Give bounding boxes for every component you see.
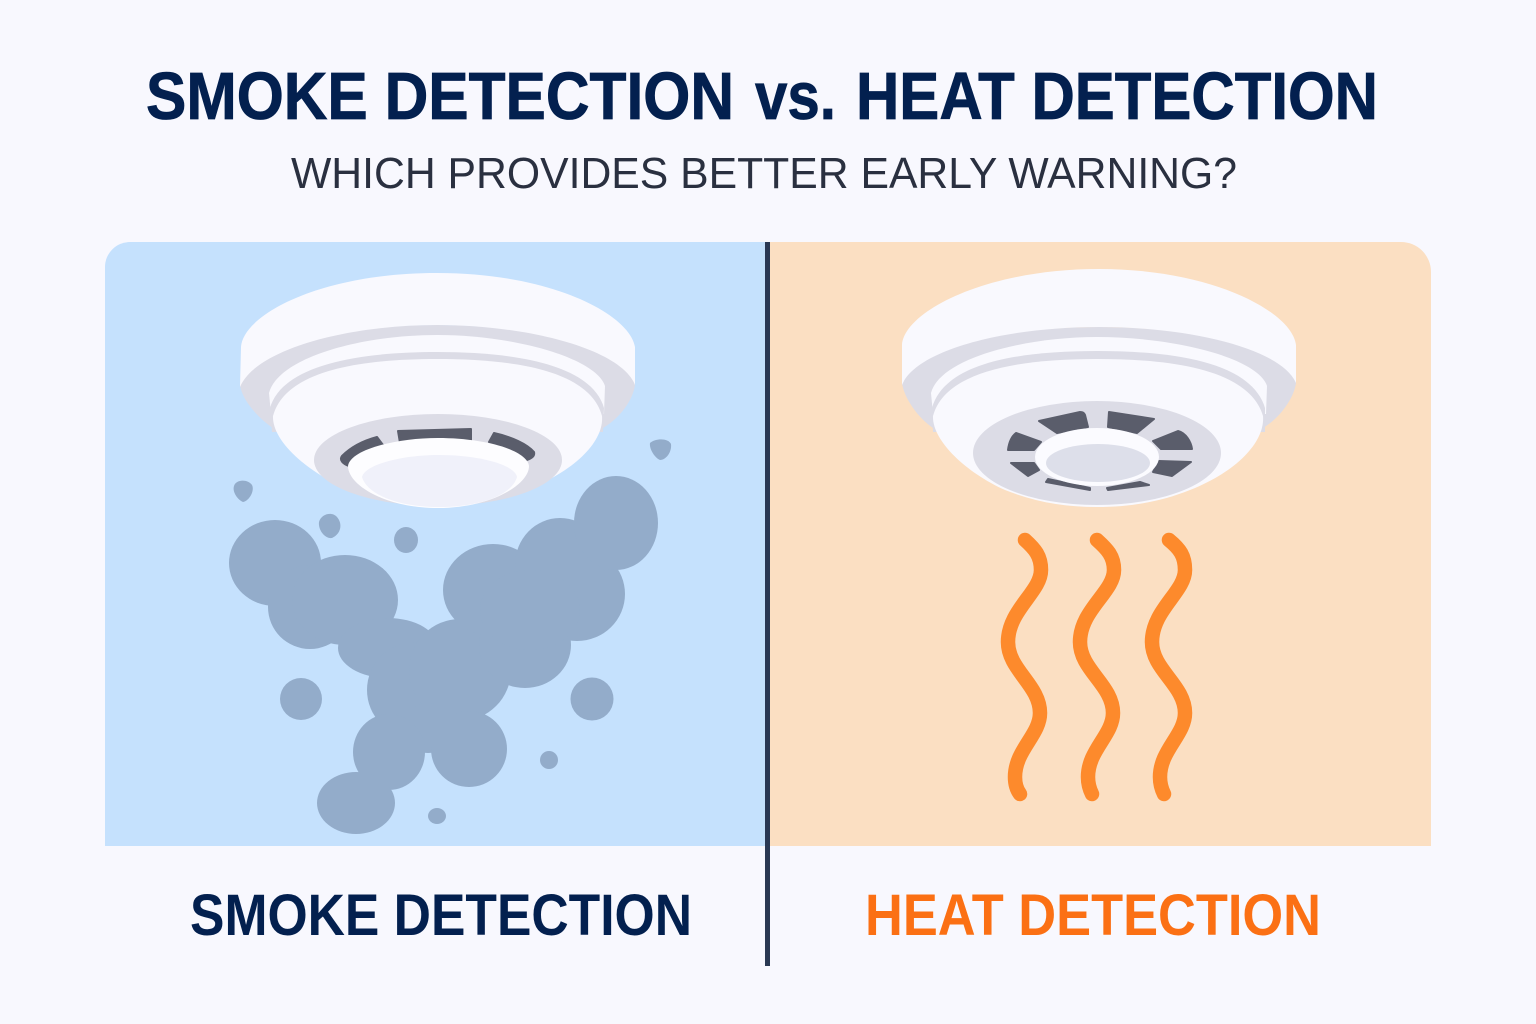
panel background: heat	[770, 242, 1431, 846]
title	[146, 59, 1378, 134]
center divider line	[765, 242, 770, 966]
panel: heat detection	[770, 242, 1431, 846]
icon: heat detector	[902, 269, 1296, 507]
panel: smoke detection	[105, 242, 766, 846]
panel background: smoke	[105, 242, 766, 846]
title: SMOKE DETECTION	[146, 59, 734, 134]
title: vs.	[755, 59, 836, 134]
label: heat detection: HEAT DETECTION	[865, 883, 1321, 948]
title: HEAT DETECTION	[856, 59, 1378, 134]
label: smoke detection: SMOKE DETECTION	[190, 883, 692, 948]
icon: smoke detector	[240, 273, 635, 508]
smoke cloud	[229, 439, 671, 834]
subtitle: WHICH PROVIDES BETTER EARLY WARNING?	[291, 149, 1237, 198]
heat waves	[1008, 540, 1185, 794]
